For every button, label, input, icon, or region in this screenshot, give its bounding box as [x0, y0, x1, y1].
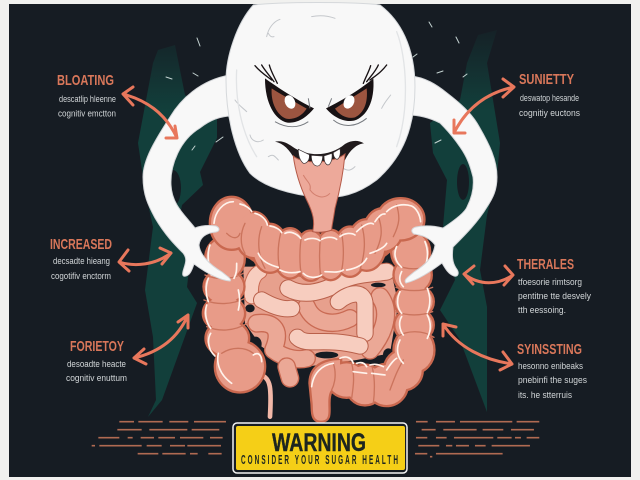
label: forietoy: desoadte heacte: [67, 359, 126, 369]
small tick marks: [166, 22, 467, 150]
teeth: [298, 149, 340, 166]
label: bloating: BLOATING: [57, 72, 114, 89]
label: sunietty: [519, 71, 580, 118]
label: forietoy: FORIETOY: [70, 338, 124, 355]
large colon: sides and bottom: [204, 232, 434, 421]
head shading: [235, 16, 405, 170]
label: therales: pentitne tte desvely: [518, 291, 591, 301]
arrow: therales: [464, 266, 513, 285]
label: bloating: descatlip hleenne: [59, 94, 116, 104]
label: therales: tth eessoing.: [518, 305, 566, 315]
label: sunietty: SUNIETTY: [519, 71, 574, 88]
label: increased: decsadte hieang: [53, 256, 110, 266]
warning heading: WARNING: [272, 429, 366, 457]
label: syinssting: hesonno enibeaks: [518, 361, 583, 371]
character head: [226, 2, 415, 232]
warning sign: [233, 423, 407, 473]
appendix: [263, 376, 271, 417]
label: increased: cogotifiv enctorm: [51, 271, 111, 281]
arrow: increased: [119, 248, 171, 271]
colon highlights: [206, 202, 430, 387]
under-eye lines: [275, 98, 367, 127]
label: bloating: cognitiv emctton: [58, 108, 116, 118]
label: increased: [50, 236, 112, 281]
label: syinssting: [517, 341, 587, 400]
right eye: [326, 65, 387, 121]
small intestine: [243, 267, 398, 378]
label: forietoy: cognitiv enuttum: [66, 373, 127, 383]
label: therales: tfoesorie rimtsorg: [518, 277, 582, 287]
label: syinssting: its. he stterruis: [518, 390, 572, 400]
large colon: top band: [211, 198, 423, 280]
label: therales: [517, 256, 591, 315]
mouth: [275, 141, 364, 166]
top colon underside: [243, 245, 390, 272]
decorative dashes: left: [92, 422, 226, 454]
label: therales: THERALES: [517, 256, 574, 273]
tongue: [293, 154, 345, 232]
label: forietoy: [66, 338, 127, 383]
left eye: [255, 65, 314, 123]
arrow: sunietty: [454, 79, 514, 133]
label: sunietty: deswatop hesande: [520, 93, 579, 103]
head body: [226, 2, 415, 197]
teal background shapes: [138, 30, 500, 417]
label: syinssting: SYINSSTING: [517, 341, 582, 358]
decorative dashes: right: [415, 422, 539, 457]
warning subheading: CONSIDER YOUR SUGAR HEALTH: [241, 453, 400, 467]
arrow: bloating: [123, 87, 177, 138]
arrow: forietoy: [134, 315, 188, 364]
label: sunietty: cognitiy euctons: [519, 108, 580, 118]
label: increased: INCREASED: [50, 236, 112, 253]
arm and hand: left: [143, 75, 232, 281]
label: syinssting: pnebinfi the suges: [518, 375, 587, 385]
arm and hand: right: [405, 76, 497, 283]
label: bloating: [57, 72, 116, 118]
intestines: [204, 198, 434, 421]
arrow: syinssting: [443, 324, 512, 370]
